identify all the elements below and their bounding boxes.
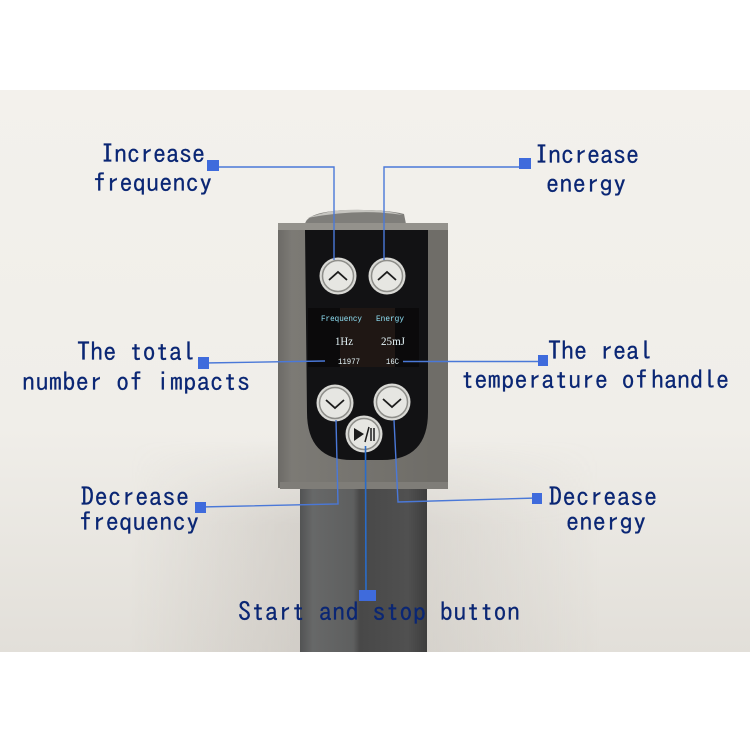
callout: increase energy	[384, 142, 639, 260]
photo background: wall	[0, 90, 750, 652]
button: decrease frequency	[316, 384, 354, 422]
callout: start and stop button	[238, 446, 520, 625]
callout: total number of impacts: The total	[77, 339, 195, 365]
display: temperature: 16C	[386, 358, 399, 367]
callout: start and stop button: Start and stop button	[238, 599, 520, 625]
display: frequency header: Frequency	[321, 315, 362, 324]
callout: increase frequency	[93, 141, 334, 260]
callout: decrease frequency: Decrease	[81, 484, 189, 510]
callout: increase frequency: Increase	[101, 141, 205, 167]
display: impact count: 11977	[338, 358, 360, 367]
pole	[300, 488, 427, 652]
callout: decrease energy	[394, 420, 657, 535]
top cylinder	[305, 210, 406, 224]
callout: temperature of handle: The real	[548, 338, 652, 364]
black control panel	[305, 230, 428, 460]
button: start and stop	[346, 416, 382, 452]
callout: decrease energy: energy	[566, 509, 646, 535]
device illustration	[278, 210, 448, 652]
display: energy header: Energy	[376, 315, 404, 324]
display screen	[308, 308, 419, 367]
callout: decrease energy: Decrease	[549, 484, 657, 510]
callout: increase energy: energy	[546, 171, 626, 197]
handle body	[278, 223, 448, 488]
button: increase energy	[368, 258, 406, 294]
callout: decrease frequency: frequency	[79, 509, 199, 535]
callout: increase energy: Increase	[535, 142, 639, 168]
callout: total number of impacts: number of impacts	[22, 369, 250, 395]
button: increase frequency	[320, 258, 356, 294]
callout: temperature of handle: handle	[651, 367, 729, 393]
button: decrease energy	[374, 384, 410, 420]
callout: total number of impacts	[22, 339, 325, 395]
callout: temperature of handle: temperature of	[461, 367, 648, 393]
display: energy value: 25mJ	[381, 334, 405, 348]
display: frequency value: 1Hz	[335, 334, 353, 348]
callout: temperature of handle	[403, 338, 729, 393]
callout: decrease frequency	[79, 420, 338, 535]
callout: increase frequency: frequency	[93, 170, 212, 196]
